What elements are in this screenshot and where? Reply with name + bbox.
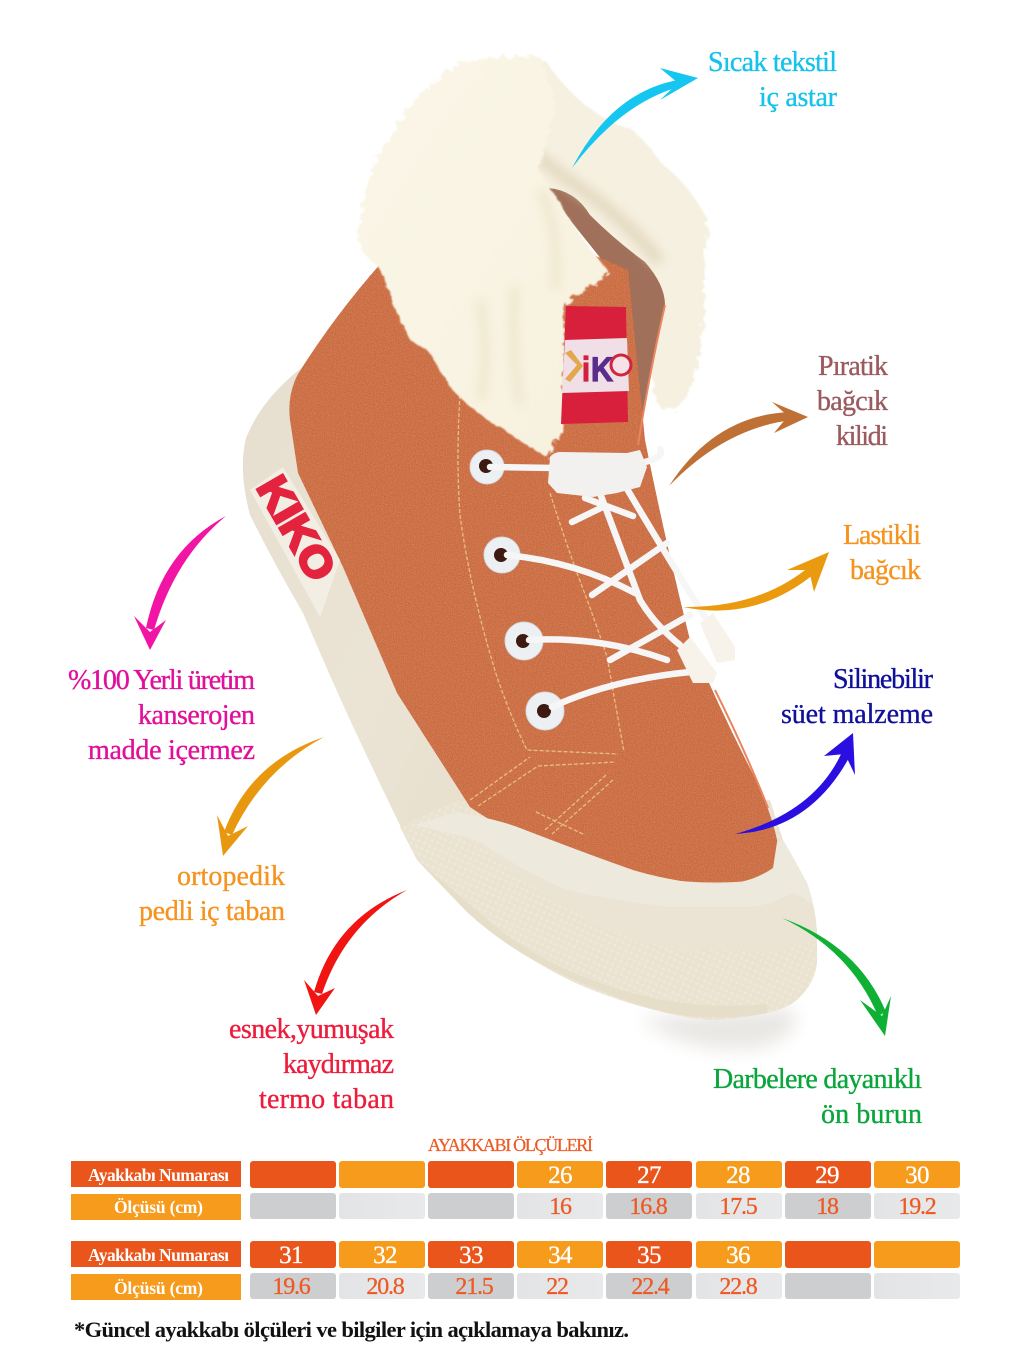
size cells: 31 [279,1242,303,1269]
back fur shading [530,150,660,262]
callout: practical lace lock [669,351,888,486]
arrow: magenta [146,516,226,630]
measure cells: 20.8 [366,1274,405,1300]
callout: domestic production: kanserojen [138,700,255,731]
back fur lining [490,60,708,411]
row header labels: Ölçüsü (cm) [114,1197,203,1217]
callout: flexible sole: esnek,yumuşak [229,1014,394,1045]
elastic laces [490,449,705,707]
toe middle band [477,840,817,950]
sole bottom rim [417,860,767,1018]
size cells [250,1241,960,1269]
size table: row group 2 [71,1241,960,1300]
arrow: blue [735,752,850,834]
arrow: orange [683,566,814,611]
row header labels: Ölçüsü (cm) [114,1278,203,1298]
coral edge binding [638,305,768,808]
measure cells: 17.5 [719,1194,758,1220]
callout: warm textile lining: iç astar [759,82,838,113]
callout: impact resistant toe: Darbelere dayanıklı [713,1064,922,1095]
callout: practical lace lock: bağcık [817,386,888,417]
size cells: 35 [637,1242,661,1269]
arrow: red [314,890,407,994]
measure cells: 21.5 [455,1274,494,1300]
callout: elastic laces: bağcık [850,555,921,586]
callout: wipeable suede: süet malzeme [781,699,933,730]
measure cells: 19.2 [898,1194,936,1220]
callout: warm textile lining: Sıcak tekstil [708,47,837,78]
callout: practical lace lock: Pıratik [818,351,888,382]
arrow: green [782,918,886,1016]
measure cells: 22.4 [631,1274,670,1300]
callout: wipeable suede: Silinebilir [833,664,934,695]
brand label: i [582,351,590,389]
arrow: amber [224,737,324,835]
front fur collar [359,57,610,457]
heel logo tab: KIKO [248,468,345,588]
size cells: 33 [459,1242,483,1269]
shoe illustration [243,57,817,1049]
suede upper [289,240,777,882]
size table: row group 1 [71,1161,960,1220]
toe welt band [415,812,813,907]
fur folds [480,190,556,405]
size cells: 29 [815,1162,839,1189]
arrow: brown [669,412,792,486]
brand label: K [591,351,613,389]
size cells [250,1161,960,1189]
callout: impact resistant toe [713,918,922,1130]
size cells: 28 [726,1162,750,1189]
measure cells [250,1273,960,1300]
size table heading: AYAKKABI ÖLÇÜLERİ [428,1135,593,1155]
callout: elastic laces [683,520,921,611]
eyelet holes [479,459,551,718]
row header labels: Ayakkabı Numarası [88,1165,229,1185]
callout: flexible sole: termo taban [259,1084,394,1115]
callout: flexible sole [229,890,407,1115]
arrow: cyan [572,80,682,168]
callout: orthopedic insole: pedli iç taban [139,896,285,927]
size cells: 30 [905,1162,929,1189]
lace stopper [548,450,647,497]
callout: practical lace lock: kilidi [836,421,888,452]
ground shadow [640,1008,796,1049]
size cells: 36 [726,1242,750,1269]
footnote: *Güncel ayakkabı ölçüleri ve bilgiler için açıklamaya bakınız. [74,1317,629,1342]
size cells: 32 [373,1242,397,1269]
row header labels: Ayakkabı Numarası [88,1245,229,1265]
callout: orthopedic insole: ortopedik [177,861,285,892]
size cells: 26 [548,1162,572,1189]
row header labels [71,1161,241,1220]
inner collar [548,188,665,450]
measure cells: 19.6 [272,1274,311,1300]
size cells: 34 [548,1242,573,1269]
measure cells: 22 [546,1274,568,1300]
size cells: 27 [637,1162,661,1189]
lace ends [677,613,735,683]
callout: flexible sole: kaydırmaz [283,1049,394,1080]
rubber sole [243,366,470,860]
measure cells: 16.8 [629,1194,668,1220]
callout: orthopedic insole [139,737,324,927]
callout: elastic laces: Lastikli [843,520,921,551]
measure cells: 16 [549,1194,572,1220]
eyelets [470,450,564,730]
callout: domestic production: %100 Yerli üretim [68,665,255,696]
measure cells: 22.8 [719,1274,758,1300]
callout: domestic production [68,516,255,766]
callout: impact resistant toe: ön burun [821,1099,922,1130]
row header labels [71,1241,241,1300]
side stitching [458,395,624,835]
measure cells [250,1193,960,1220]
callout: warm textile lining [572,47,838,168]
callout: wipeable suede [735,664,934,834]
measure cells: 18 [816,1194,839,1220]
callout: domestic production: madde içermez [88,735,255,766]
toe cap base [400,800,817,1020]
brand label [561,306,631,424]
